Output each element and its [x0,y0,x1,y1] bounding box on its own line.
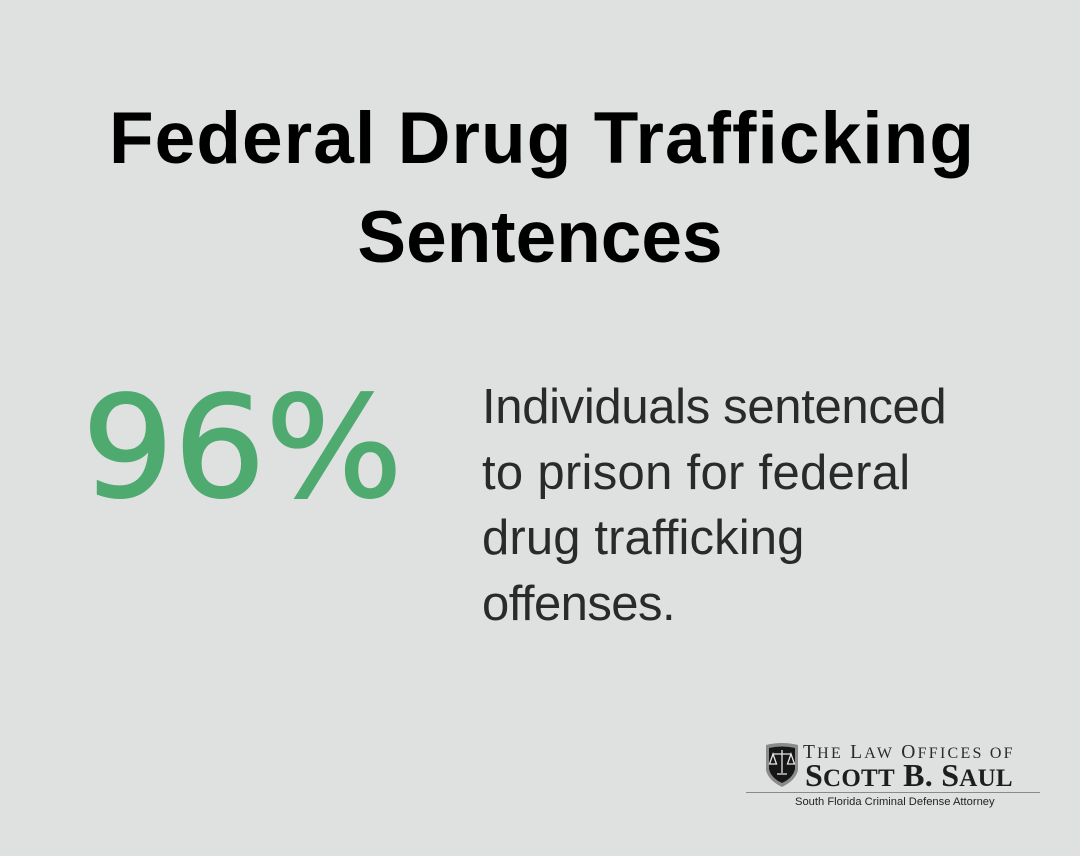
title [109,98,975,278]
big stat: 96%: 96% [82,367,403,530]
title: Sentences [357,197,723,278]
description text: drug trafficking [482,511,805,565]
firm name top line: THE LAW OFFICES OF [803,742,1015,763]
firm name bottom line: SCOTT B. SAUL [805,757,1013,793]
description text: Individuals sentenced [482,380,946,434]
tagline: South Florida Criminal Defense Attorney [795,796,995,808]
divider line [746,792,1040,793]
description text: to prison for federal [482,446,910,500]
title: Federal Drug Trafficking [109,98,975,179]
icon: shield with scales [766,743,798,787]
logo [746,742,1040,808]
description text: offenses. [482,576,675,630]
description text [482,380,946,630]
